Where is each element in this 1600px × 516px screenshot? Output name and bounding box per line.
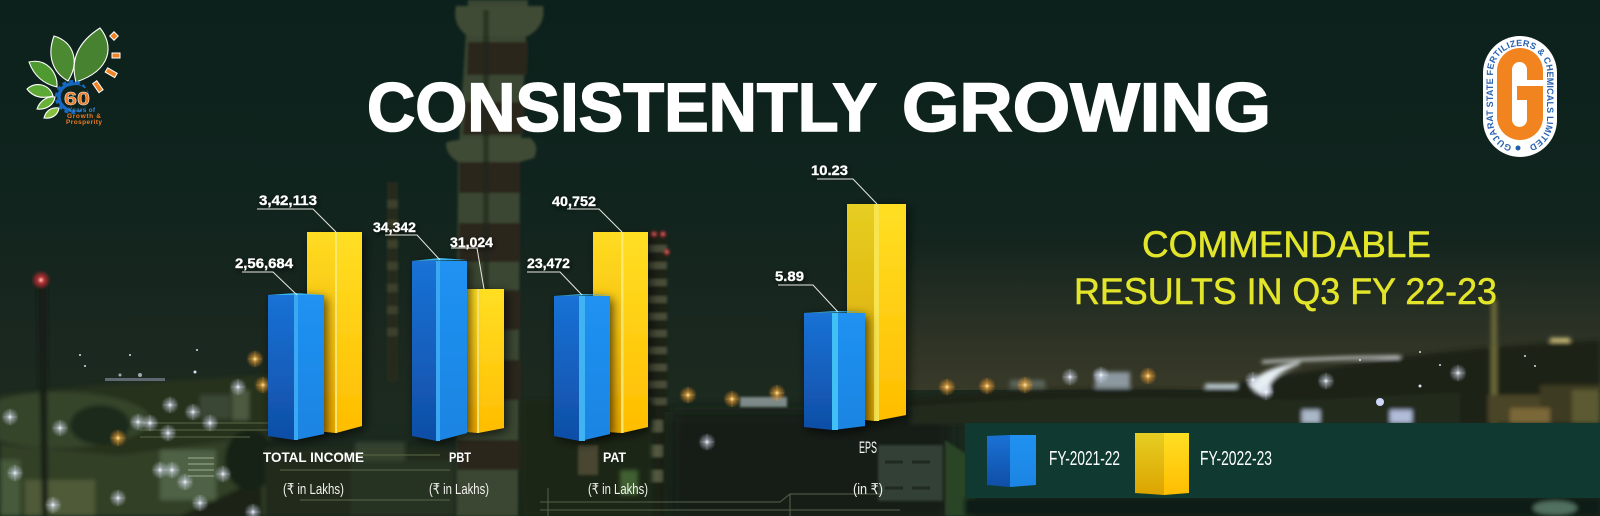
- value: 2,56,684: 2,56,684: [235, 255, 293, 271]
- unit: in lakhs: (₹ in Lakhs): [283, 481, 344, 498]
- title: [367, 69, 1271, 146]
- bar: EPS FY 2022-23: [847, 204, 906, 421]
- legend: [965, 423, 1600, 498]
- bar: total income FY 2022-23: [307, 232, 362, 433]
- value: 34,342: 34,342: [373, 219, 416, 235]
- legend label: FY 2022-23: FY-2022-23: [1200, 448, 1272, 470]
- unit: in lakhs: (₹ in Lakhs): [588, 481, 648, 498]
- panel: commendable results heading: COMMENDABLE: [1142, 224, 1431, 265]
- logo text: years of growth and prosperity: [66, 107, 102, 126]
- logo: 60 years of growth and prosperity: [27, 28, 120, 126]
- chart: PAT: [527, 193, 648, 498]
- label: EPS: EPS: [859, 439, 877, 457]
- value: 5.89: [775, 268, 838, 312]
- value: 23,472: 23,472: [527, 255, 570, 271]
- logo text: years of growth and prosperity: Growth &: [67, 113, 101, 120]
- chart: PBT: [373, 219, 504, 498]
- logo: GSFC: GUJARAT STATE FERTILIZERS & CHEMICALS LIMITED: [1486, 40, 1554, 151]
- title: CONSISTENTLY: [367, 69, 877, 146]
- legend swatch: FY 2021-22: [987, 435, 1036, 487]
- label: total income: TOTAL INCOME: [263, 450, 364, 465]
- bar: PAT FY 2021-22: [554, 294, 610, 441]
- value: 31,024: [450, 234, 493, 289]
- panel: commendable results heading: RESULTS IN Q3 FY 22-23: [1074, 271, 1497, 312]
- title: GROWING: [902, 69, 1271, 146]
- value: 40,752: 40,752: [552, 193, 596, 209]
- logo: company name on path: [1493, 46, 1547, 147]
- value: 2,56,684: [235, 255, 297, 295]
- chart: total income: [235, 192, 364, 498]
- value: 3,42,113: [257, 192, 336, 232]
- background: right horizon, treeline and buildings: [910, 300, 1600, 516]
- background: centre plant and buildings: [522, 397, 975, 516]
- value: 5.89: 5.89: [775, 268, 804, 284]
- logo: orange G: [1497, 48, 1543, 140]
- legend label: FY 2021-22: FY-2021-22: [1049, 448, 1120, 470]
- chart: EPS: [775, 162, 906, 498]
- icon: gear: [56, 82, 89, 112]
- value: 31,024: 31,024: [450, 234, 493, 250]
- bar: total income FY 2021-22: [268, 293, 324, 440]
- value: 3,42,113: 3,42,113: [259, 192, 317, 208]
- background: banded chimney with red beacons: [643, 230, 671, 516]
- value: 34,342: [373, 219, 440, 260]
- logo text: 60: 60: [64, 89, 90, 109]
- label: PAT: PAT: [603, 450, 627, 465]
- unit: in lakhs: (₹ in Lakhs): [429, 481, 489, 498]
- background: pipe racks: [140, 423, 450, 500]
- bar: PBT FY 2021-22: [412, 258, 467, 441]
- legend swatch: FY 2022-23: [1135, 433, 1189, 495]
- panel: commendable results heading: [1074, 224, 1497, 312]
- bar: PAT FY 2022-23: [593, 232, 648, 433]
- background: thin striped chimney: [387, 182, 398, 382]
- bar: PBT FY 2022-23: [467, 289, 504, 433]
- logo text: years of growth and prosperity: Prosperity: [66, 119, 102, 126]
- value: 10.23: [811, 162, 877, 204]
- value: 10.23: 10.23: [811, 162, 848, 178]
- icon: sun rays: [93, 32, 120, 93]
- icon: leaves: [27, 28, 108, 118]
- background: plant lights: [1, 270, 1536, 516]
- value: 40,752: [552, 193, 622, 232]
- label: PBT: PBT: [449, 450, 472, 465]
- logo text: years of growth and prosperity: Years of: [68, 107, 96, 114]
- logo: blue dot: [1516, 146, 1520, 150]
- value: 23,472: [527, 255, 582, 295]
- unit: in rupees: (in ₹): [853, 481, 883, 498]
- bar: EPS FY 2021-22: [804, 311, 865, 430]
- background: main chimney: [446, 0, 543, 516]
- background: left plant structures: [0, 280, 455, 516]
